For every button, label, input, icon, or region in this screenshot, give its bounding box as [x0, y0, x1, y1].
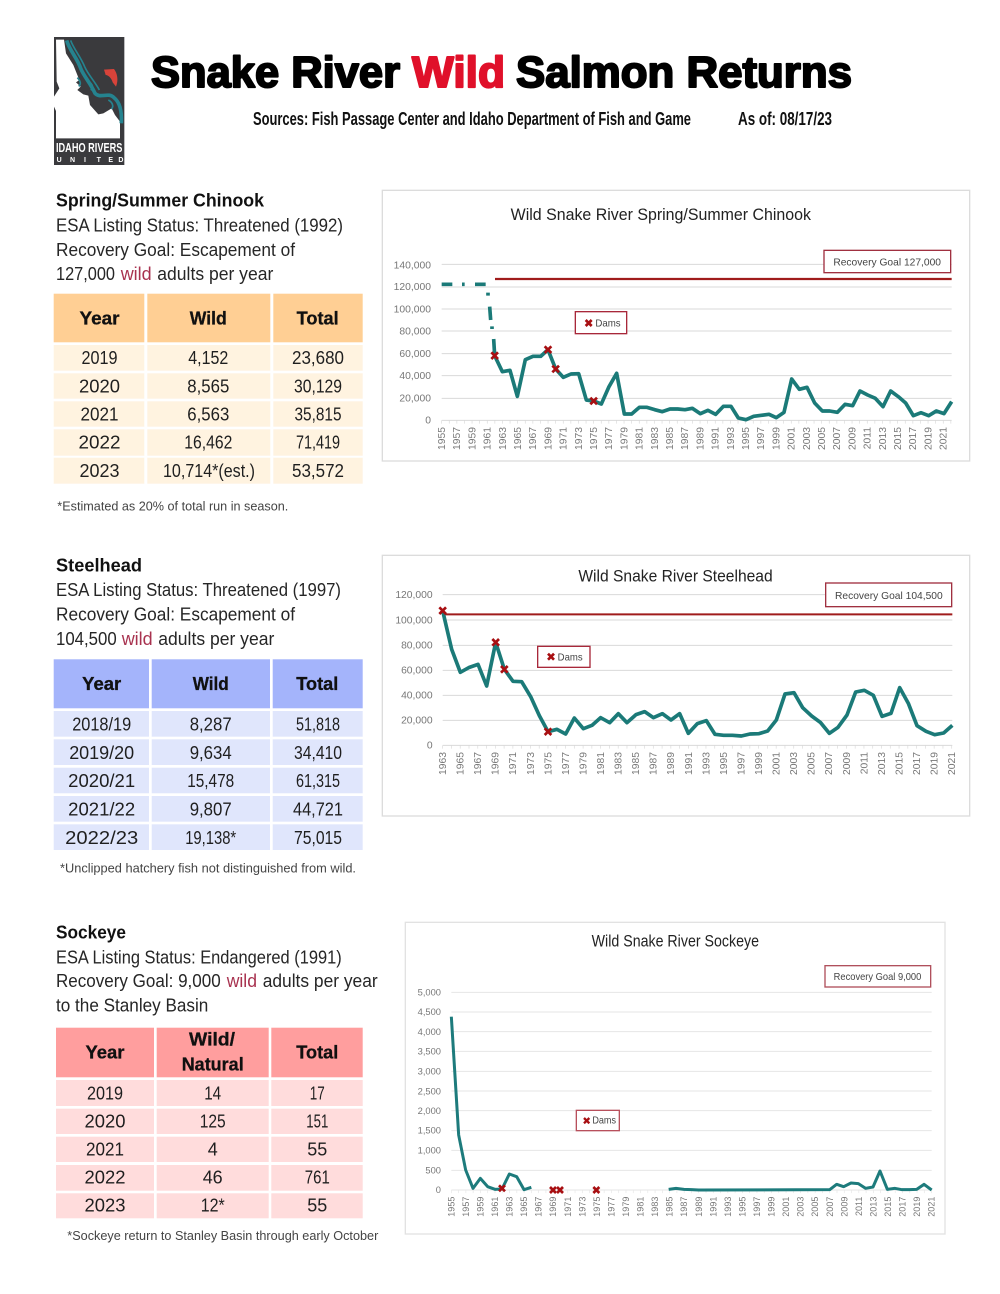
table: chinook: 23,680 — [292, 348, 344, 368]
chart: wild snake river sockeye: 2,000 — [418, 1106, 441, 1116]
table: steelhead: 61,315 — [296, 771, 340, 791]
chart: wild snake river sockeye: 1957 — [461, 1197, 471, 1217]
table: sockeye: 55 — [307, 1140, 327, 1160]
table: chinook: 71,419 — [296, 433, 340, 453]
chart: wild snake river sockeye: 1955 — [446, 1197, 456, 1217]
chart: wild snake river spring/summer chinook: 1963 — [498, 427, 509, 450]
panel: steelhead text: adults per year — [158, 629, 274, 649]
chart: wild snake river sockeye: 1969 — [548, 1197, 558, 1217]
chart: wild snake river steelhead: 1995 — [719, 752, 730, 775]
chart: wild snake river sockeye: 4,500 — [418, 1007, 441, 1017]
chart: wild snake river steelhead: 120,000 — [395, 590, 433, 601]
chart: wild snake river steelhead: 1997 — [736, 752, 747, 775]
table: chinook: 2022 — [78, 433, 120, 453]
chart: wild snake river sockeye: 1965 — [519, 1197, 529, 1217]
chart: wild snake river spring/summer chinook: 2011 — [863, 427, 874, 449]
sources line: Sources: Fish Passage Center and Idaho Department of Fish and Game — [253, 109, 691, 129]
chart: wild snake river sockeye: 0 — [436, 1185, 441, 1195]
chart: wild snake river sockeye: 2005 — [810, 1197, 820, 1217]
chart: wild snake river steelhead: 1977 — [561, 752, 572, 775]
chart: wild snake river steelhead: 1963 — [438, 752, 449, 775]
chart: wild snake river sockeye: 1993 — [723, 1197, 733, 1217]
chart: wild snake river spring/summer chinook: 1987 — [680, 427, 691, 450]
chart: wild snake river sockeye: 1981 — [636, 1197, 646, 1217]
chart: wild snake river sockeye: 2011 — [854, 1197, 864, 1216]
panel: sockeye text: wild — [226, 971, 257, 991]
chart: wild snake river spring/summer chinook: 2007 — [832, 427, 843, 450]
chart: wild snake river spring/summer chinook: 2013 — [878, 427, 889, 450]
chart: wild snake river sockeye: 2013 — [868, 1197, 878, 1217]
chart: wild snake river sockeye: 1,500 — [418, 1126, 441, 1136]
chart: wild snake river steelhead: 1993 — [701, 752, 712, 775]
table: sockeye: 55 — [307, 1196, 327, 1216]
chart: wild snake river sockeye: 2001 — [781, 1197, 791, 1217]
chart: wild snake river sockeye: Recovery Goal 9,000 — [834, 972, 921, 983]
chart: wild snake river spring/summer chinook: 2003 — [802, 427, 813, 450]
chart: wild snake river spring/summer chinook: 1969 — [543, 427, 554, 450]
table: chinook: 16,462 — [184, 433, 232, 453]
chart: wild snake river spring/summer chinook: 1995 — [741, 427, 752, 450]
footnote: chinook: *Estimated as 20% of total run in season. — [57, 499, 288, 514]
table: sockeye: 12* — [201, 1196, 225, 1216]
chart: wild snake river steelhead: 1985 — [631, 752, 642, 775]
chart: wild snake river sockeye: 3,000 — [418, 1067, 441, 1077]
chart: wild snake river spring/summer chinook: 1965 — [513, 427, 524, 450]
chart: wild snake river sockeye: 2009 — [839, 1197, 849, 1217]
chart: wild snake river sockeye: 1989 — [694, 1197, 704, 1217]
chart: wild snake river spring/summer chinook: 1973 — [574, 427, 585, 450]
chart: wild snake river spring/summer chinook: 1993 — [726, 427, 737, 450]
table: sockeye: Year — [86, 1042, 124, 1062]
panel: steelhead text: ESA Listing Status: Threatened (1997) — [56, 580, 341, 600]
table: sockeye: 2020 — [84, 1112, 126, 1132]
chart: wild snake river sockeye: 1973 — [577, 1197, 587, 1217]
chart: wild snake river sockeye: Dams — [592, 1116, 616, 1127]
panel: sockeye text: ESA Listing Status: Endangered (1991) — [56, 947, 342, 967]
table: steelhead: 51,818 — [296, 714, 340, 734]
chart: wild snake river steelhead: 2011 — [859, 752, 870, 774]
logo: Idaho Rivers United: UNITED — [57, 157, 123, 164]
chart: wild snake river steelhead: 100,000 — [395, 615, 433, 626]
chart: wild snake river steelhead: 2021 — [947, 752, 958, 775]
chart: wild snake river steelhead: 1981 — [596, 752, 607, 775]
chart: wild snake river spring/summer chinook: 1959 — [467, 427, 478, 450]
chart: wild snake river spring/summer chinook: 2009 — [847, 427, 858, 450]
chart: wild snake river spring/summer chinook: 140,000 — [394, 260, 431, 271]
table: sockeye — [56, 1028, 363, 1218]
chart: wild snake river sockeye — [404, 922, 946, 1235]
table: steelhead: 2018/19 — [72, 714, 131, 734]
chart: wild snake river spring/summer chinook: 1989 — [695, 427, 706, 450]
chart: wild snake river spring/summer chinook: 1979 — [619, 427, 630, 450]
title — [151, 48, 852, 97]
chart: wild snake river steelhead: 2005 — [807, 752, 818, 775]
chart: wild snake river spring/summer chinook: 1957 — [452, 427, 463, 450]
chart: wild snake river sockeye: 2015 — [883, 1197, 893, 1217]
chart: wild snake river spring/summer chinook: 1961 — [483, 427, 494, 450]
chart: wild snake river steelhead: 1987 — [649, 752, 660, 775]
table: steelhead: Total — [296, 674, 338, 694]
panel: steelhead text — [56, 555, 341, 649]
chart: wild snake river sockeye: 1,000 — [418, 1145, 441, 1155]
chart: wild snake river steelhead: 2003 — [789, 752, 800, 775]
chart: wild snake river spring/summer chinook: 1983 — [650, 427, 661, 450]
chart: wild snake river sockeye: 2,500 — [418, 1086, 441, 1096]
chart: wild snake river spring/summer chinook: 1991 — [711, 427, 722, 450]
chart: wild snake river spring/summer chinook: 2019 — [923, 427, 934, 450]
chart: wild snake river sockeye: 1999 — [767, 1197, 777, 1217]
chart: wild snake river steelhead: 1975 — [543, 752, 554, 775]
chart: wild snake river steelhead: 1973 — [526, 752, 537, 775]
chart: wild snake river steelhead: 1989 — [666, 752, 677, 775]
table: chinook: 30,129 — [294, 376, 342, 396]
chart: wild snake river sockeye: 1963 — [505, 1197, 515, 1217]
chart: wild snake river spring/summer chinook: Dams — [595, 318, 621, 329]
chart: wild snake river spring/summer chinook: 80,000 — [399, 326, 431, 337]
table: sockeye: 2021 — [86, 1140, 124, 1160]
table: chinook: 2019 — [82, 348, 118, 368]
chart: wild snake river sockeye: 1975 — [592, 1197, 602, 1217]
chart: wild snake river steelhead: 20,000 — [401, 716, 433, 727]
table: chinook: 35,815 — [294, 405, 342, 425]
table: steelhead: 9,634 — [190, 743, 232, 763]
chart: wild snake river steelhead: Recovery Goal 104,500 — [835, 591, 943, 602]
table: chinook: 53,572 — [292, 461, 344, 481]
table: steelhead: 19,138* — [185, 828, 236, 848]
chart: wild snake river spring/summer chinook: Recovery Goal 127,000 — [833, 258, 941, 269]
chart: wild snake river steelhead: 1991 — [684, 752, 695, 775]
chart: wild snake river steelhead: 40,000 — [401, 691, 433, 702]
table: steelhead: 2020/21 — [68, 771, 135, 791]
panel: spring/summer chinook text: wild — [120, 264, 152, 284]
table: steelhead: 2021/22 — [68, 799, 135, 819]
chart: wild snake river sockeye: 3,500 — [418, 1047, 441, 1057]
table: chinook: 2023 — [80, 461, 120, 481]
chart: wild snake river steelhead: 1979 — [578, 752, 589, 775]
title: Snake River — [151, 48, 400, 97]
chart: wild snake river steelhead: 60,000 — [401, 666, 433, 677]
table: steelhead: 34,410 — [294, 743, 342, 763]
chart: wild snake river spring/summer chinook: 60,000 — [399, 349, 431, 360]
chart: wild snake river sockeye: 1985 — [665, 1197, 675, 1217]
chart: wild snake river sockeye: 2017 — [898, 1197, 908, 1217]
panel: steelhead text: Recovery Goal: Escapement of — [56, 605, 296, 625]
chart: wild snake river spring/summer chinook: 1955 — [437, 427, 448, 450]
table: steelhead: 2019/20 — [69, 743, 134, 763]
title: Salmon Returns — [516, 48, 852, 97]
chart: wild snake river steelhead: 2009 — [842, 752, 853, 775]
chart: wild snake river spring/summer chinook: 2005 — [817, 427, 828, 450]
panel: spring/summer chinook text: Spring/Summer Chinook — [56, 191, 265, 211]
chart: wild snake river sockeye: 5,000 — [418, 987, 441, 997]
table: chinook: 2021 — [80, 405, 118, 425]
chart: wild snake river spring/summer chinook: 2001 — [787, 427, 798, 450]
table: steelhead: 8,287 — [190, 714, 232, 734]
chart: wild snake river steelhead: 1967 — [473, 752, 484, 775]
logo: Idaho Rivers United — [54, 37, 124, 165]
chart: wild snake river sockeye: 2021 — [927, 1197, 937, 1217]
table: sockeye: 14 — [204, 1083, 221, 1103]
chart: wild snake river spring/summer chinook: 40,000 — [399, 371, 431, 382]
chart: wild snake river steelhead: 2013 — [877, 752, 888, 775]
chart: wild snake river steelhead: 80,000 — [401, 641, 433, 652]
table: steelhead: 9,807 — [190, 799, 232, 819]
table: steelhead: 75,015 — [294, 828, 342, 848]
panel: sockeye text: Sockeye — [56, 922, 126, 942]
chart: wild snake river steelhead: 1999 — [754, 752, 765, 775]
chart: wild snake river spring/summer chinook: Wild Snake River Spring/Summer Chinook — [511, 206, 812, 224]
chart: wild snake river spring/summer chinook: 1985 — [665, 427, 676, 450]
chart: wild snake river steelhead — [382, 554, 970, 817]
chart: wild snake river spring/summer chinook: 1999 — [771, 427, 782, 450]
chart: wild snake river steelhead: Dams — [558, 652, 583, 663]
table: sockeye: Wild/ — [189, 1030, 235, 1050]
footnote: steelhead: *Unclipped hatchery fish not distinguished from wild. — [60, 861, 356, 876]
chart: wild snake river steelhead: Wild Snake River Steelhead — [578, 568, 773, 586]
panel: sockeye text — [56, 922, 378, 1016]
table: sockeye: 2023 — [84, 1196, 126, 1216]
chart: wild snake river sockeye: 1983 — [650, 1197, 660, 1217]
chart: wild snake river steelhead: 1965 — [456, 752, 467, 775]
table: sockeye: 2022 — [84, 1168, 126, 1188]
chart: wild snake river spring/summer chinook: 1975 — [589, 427, 600, 450]
table: chinook: 6,563 — [187, 405, 229, 425]
chart: wild snake river steelhead: 1969 — [491, 752, 502, 775]
table: sockeye: 151 — [306, 1112, 328, 1132]
chart: wild snake river sockeye: 4,000 — [418, 1027, 441, 1037]
table: chinook: Wild — [190, 308, 227, 328]
panel: spring/summer chinook text: Recovery Goal: Escapement of — [56, 240, 296, 260]
chart: wild snake river steelhead: 0 — [427, 741, 433, 752]
table: steelhead: 15,478 — [187, 771, 234, 791]
panel: steelhead text: 104,500 — [56, 629, 117, 649]
chart: wild snake river spring/summer chinook: 20,000 — [399, 394, 431, 405]
chart: wild snake river sockeye: Wild Snake River Sockeye — [592, 933, 759, 951]
table: sockeye: Total — [296, 1042, 338, 1062]
chart: wild snake river sockeye: 1991 — [708, 1197, 718, 1217]
chart: wild snake river sockeye: 1967 — [534, 1197, 544, 1217]
table: sockeye: 4 — [208, 1140, 218, 1160]
table: steelhead: 2022/23 — [65, 828, 138, 848]
chart: wild snake river sockeye: 500 — [425, 1165, 441, 1175]
chart: wild snake river sockeye: 2019 — [912, 1197, 922, 1217]
chart: wild snake river spring/summer chinook: 100,000 — [394, 304, 431, 315]
table: steelhead: 44,721 — [293, 799, 343, 819]
sources line: As of: 08/17/23 — [738, 109, 832, 129]
table: chinook: 10,714*(est.) — [163, 461, 255, 481]
panel: spring/summer chinook text: adults per year — [157, 264, 273, 284]
chart: wild snake river steelhead: 1971 — [508, 752, 519, 775]
footnote: sockeye: *Sockeye return to Stanley Basin through early October — [67, 1228, 379, 1243]
chart: wild snake river steelhead: 2007 — [824, 752, 835, 775]
chart: wild snake river steelhead: 2019 — [930, 752, 941, 775]
table: chinook: 4,152 — [188, 348, 228, 368]
chart: wild snake river sockeye: 1971 — [563, 1197, 573, 1217]
title: Wild — [412, 48, 505, 97]
table: steelhead — [54, 659, 363, 850]
table: sockeye: Natural — [182, 1055, 244, 1075]
chart: wild snake river steelhead: 2015 — [894, 752, 905, 775]
chart: wild snake river sockeye: 2007 — [825, 1197, 835, 1217]
chart: wild snake river steelhead: 2017 — [912, 752, 923, 775]
panel: spring/summer chinook text: 127,000 — [56, 264, 115, 284]
chart: wild snake river sockeye: 1961 — [490, 1197, 500, 1217]
panel: steelhead text: Steelhead — [56, 555, 142, 575]
chart: wild snake river spring/summer chinook: 2015 — [893, 427, 904, 450]
chart: wild snake river spring/summer chinook: 1981 — [635, 427, 646, 450]
chart: wild snake river sockeye: 1979 — [621, 1197, 631, 1217]
table: chinook — [54, 294, 363, 484]
table: sockeye: 2019 — [87, 1083, 123, 1103]
table: sockeye: 125 — [200, 1112, 226, 1132]
table: chinook: 8,565 — [187, 376, 229, 396]
table: steelhead: Year — [82, 674, 121, 694]
chart: wild snake river spring/summer chinook: 2017 — [908, 427, 919, 450]
panel: sockeye text: Recovery Goal: 9,000 — [56, 971, 221, 991]
chart: wild snake river sockeye: 1959 — [475, 1197, 485, 1217]
table: sockeye: 17 — [310, 1083, 325, 1103]
table: steelhead: Wild — [193, 674, 229, 694]
chart: wild snake river spring/summer chinook: 1971 — [559, 427, 570, 450]
chart: wild snake river spring/summer chinook: 1967 — [528, 427, 539, 450]
chart: wild snake river spring/summer chinook: 1997 — [756, 427, 767, 450]
panel: spring/summer chinook text — [56, 191, 343, 284]
table: chinook: Total — [297, 308, 339, 328]
chart: wild snake river spring/summer chinook: 2021 — [939, 427, 950, 450]
panel: spring/summer chinook text: ESA Listing Status: Threatened (1992) — [56, 216, 343, 236]
chart: wild snake river spring/summer chinook — [382, 190, 970, 462]
chart: wild snake river sockeye: 1995 — [737, 1197, 747, 1217]
chart: wild snake river sockeye: 2003 — [796, 1197, 806, 1217]
chart: wild snake river spring/summer chinook: 120,000 — [394, 282, 431, 293]
panel: steelhead text: wild — [121, 629, 153, 649]
panel: sockeye text: adults per year — [263, 971, 378, 991]
chart: wild snake river steelhead: 2001 — [772, 752, 783, 775]
table: sockeye: 46 — [203, 1168, 223, 1188]
chart: wild snake river sockeye: 1977 — [606, 1197, 616, 1217]
chart: wild snake river steelhead: 1983 — [614, 752, 625, 775]
table: sockeye: 761 — [305, 1168, 330, 1188]
chart: wild snake river sockeye: 1997 — [752, 1197, 762, 1217]
table: chinook: 2020 — [79, 376, 120, 396]
table: chinook: Year — [80, 308, 120, 328]
panel: sockeye text: to the Stanley Basin — [56, 996, 208, 1016]
chart: wild snake river sockeye: 1987 — [679, 1197, 689, 1217]
chart: wild snake river spring/summer chinook: 1977 — [604, 427, 615, 450]
chart: wild snake river spring/summer chinook: 0 — [425, 416, 431, 427]
